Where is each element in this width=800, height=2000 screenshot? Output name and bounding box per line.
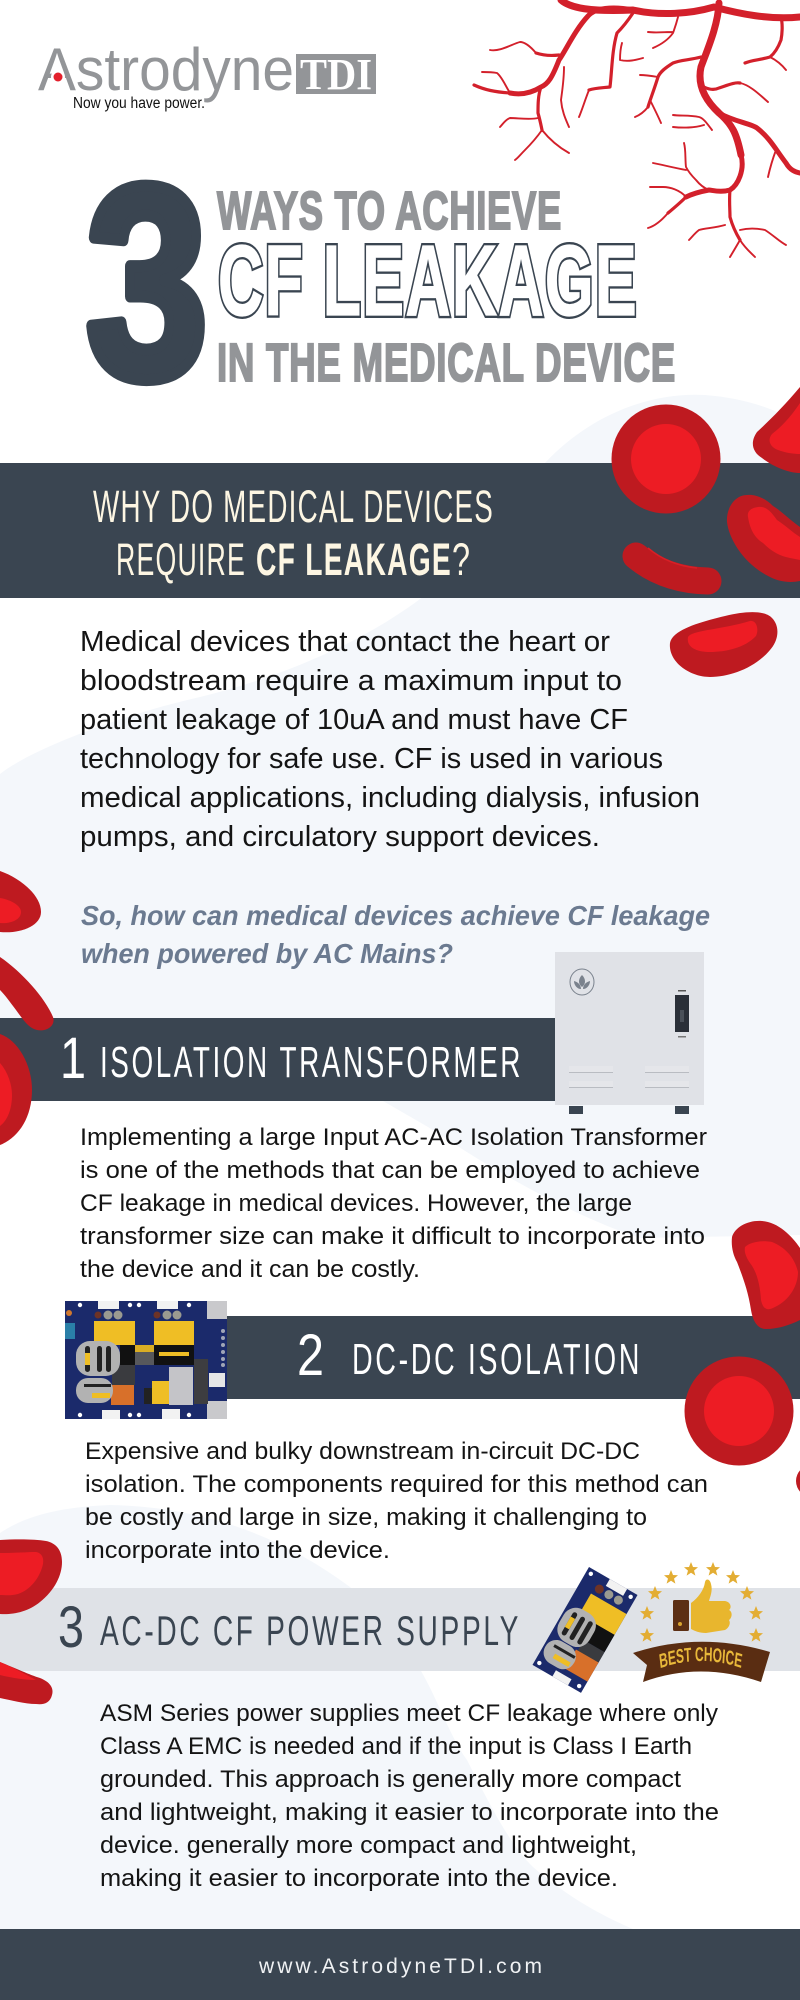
- paragraph: isolation transformer: Implementing a large Input AC-AC Isolation Transformer: [80, 1124, 707, 1151]
- paragraph: isolation transformer: is one of the methods that can be employed to achieve: [80, 1157, 700, 1184]
- banner: 1 isolation transformer: 1: [60, 1026, 86, 1091]
- paragraph: DC-DC isolation: be costly and large in size, making it challenging to: [85, 1504, 647, 1531]
- paragraph: why CF is required: medical applications, including dialysis, infusion: [80, 782, 700, 814]
- question: how to achieve CF leakage on AC mains: So, how can medical devices achieve CF leakage: [81, 900, 710, 931]
- banner: why do medical devices require CF leakage: WHY DO MEDICAL DEVICES: [93, 481, 494, 532]
- paragraph: AC-DC CF power supply: ASM Series power supplies meet CF leakage where only: [100, 1700, 719, 1727]
- banner: why do medical devices require CF leakage: REQUIRE: [116, 534, 246, 585]
- paragraph: DC-DC isolation: Expensive and bulky downstream in-circuit DC-DC: [85, 1438, 640, 1465]
- paragraph: why CF is required: Medical devices that contact the heart or: [80, 626, 611, 658]
- paragraph: AC-DC CF power supply: and lightweight, making it easier to incorporate into the: [100, 1799, 719, 1826]
- banner: 3 AC-DC CF power supply: AC-DC CF POWER SUPPLY: [100, 1607, 521, 1654]
- logo: Astrodyne TDI: Astrodyne: [38, 36, 294, 103]
- paragraph: AC-DC CF power supply: making it easier to incorporate into the device.: [100, 1865, 618, 1892]
- paragraph: AC-DC CF power supply: grounded. This approach is generally more compact: [100, 1766, 681, 1793]
- paragraph: isolation transformer: the device and it can be costly.: [80, 1256, 420, 1283]
- banner: why do medical devices require CF leakage: CF LEAKAGE: [256, 534, 452, 585]
- logo: Astrodyne TDI: TDI: [300, 50, 372, 99]
- ribbon: [633, 1642, 770, 1682]
- paragraph: isolation transformer: [80, 1124, 707, 1283]
- question: how to achieve CF leakage on AC mains: [81, 900, 710, 969]
- banner: 1 isolation transformer: [0, 1018, 560, 1101]
- paragraph: DC-DC isolation: isolation. The components required for this method can: [85, 1471, 708, 1498]
- footer: website: [0, 1929, 800, 2000]
- blood cells over banner 1: [0, 957, 54, 1145]
- paragraph: why CF is required: pumps, and circulatory support devices.: [80, 821, 600, 853]
- illustration: blood vessels: [474, 0, 800, 257]
- image: isolation transformer cabinet: [555, 952, 704, 1114]
- banner: why do medical devices require CF leakage: ?: [452, 534, 470, 585]
- paragraph: why CF is required: technology for safe use. CF is used in various: [80, 743, 663, 775]
- title: 3 ways to achieve CF leakage: [86, 130, 676, 436]
- image: AC-DC power supply board: [532, 1567, 637, 1693]
- paragraph: DC-DC isolation: incorporate into the device.: [85, 1537, 390, 1564]
- banner: 2 DC-DC isolation: DC-DC ISOLATION: [352, 1335, 642, 1384]
- blood cells on banner 2: [684, 1221, 800, 1497]
- blood cells: left cluster: [0, 871, 41, 932]
- image: DC-DC circuit board: [65, 1301, 227, 1419]
- logo: Astrodyne TDI: Now you have power.: [73, 95, 205, 112]
- paragraph: AC-DC CF power supply: device. generally more compact and lightweight,: [100, 1832, 637, 1859]
- paragraph: isolation transformer: CF leakage in medical devices. However, the large: [80, 1190, 632, 1217]
- thumbs up: [673, 1580, 732, 1633]
- title numeral 3: 3: [86, 130, 208, 436]
- title line: ways to achieve: WAYS TO ACHIEVE: [217, 181, 562, 241]
- paragraph: why CF is required: patient leakage of 10uA and must have CF: [80, 704, 628, 736]
- banner: why do medical devices require CF leakage: [0, 463, 800, 598]
- banner: 2 DC-DC isolation: [227, 1316, 800, 1399]
- paragraph: AC-DC CF power supply: [100, 1700, 719, 1892]
- badge: best choice: [633, 1562, 770, 1682]
- paragraph: DC-DC isolation: [85, 1438, 708, 1564]
- paragraph: why CF is required: bloodstream require a maximum input to: [80, 665, 622, 697]
- paragraph: why CF is required: [80, 626, 700, 853]
- banner: 3 AC-DC CF power supply: [0, 1588, 800, 1671]
- banner: 3 AC-DC CF power supply: 3: [58, 1595, 84, 1660]
- blood cells: lower left: [0, 1539, 62, 1704]
- ribbon text: BEST CHOICE: [659, 1647, 742, 1668]
- paragraph: AC-DC CF power supply: Class A EMC is needed and if the input is Class I Earth: [100, 1733, 692, 1760]
- stars: [640, 1562, 763, 1642]
- question: how to achieve CF leakage on AC mains: when powered by AC Mains?: [81, 938, 453, 969]
- paragraph: isolation transformer: transformer size can make it difficult to incorporate into: [80, 1223, 705, 1250]
- blood cells: upper right cluster: [612, 387, 800, 677]
- banner: 1 isolation transformer: ISOLATION TRANSFORMER: [100, 1038, 523, 1087]
- banner: 2 DC-DC isolation: 2: [297, 1323, 324, 1388]
- footer: website: www.AstrodyneTDI.com: [258, 1955, 542, 1978]
